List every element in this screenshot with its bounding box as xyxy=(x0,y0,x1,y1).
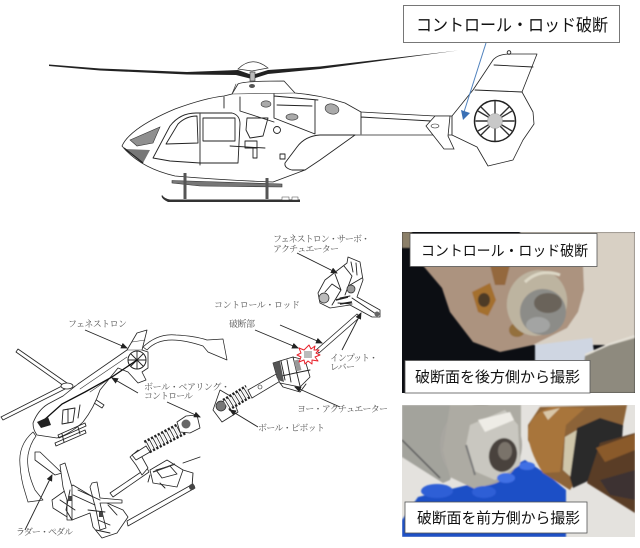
label: control rod fracture xyxy=(410,234,597,266)
main rotor xyxy=(49,50,458,88)
control linkage diagram xyxy=(1,234,388,538)
ball pivot, spring and shaft xyxy=(213,373,282,422)
label: photographed from rear: 破断面を後方側から撮影 xyxy=(415,368,580,386)
arrow: callout to tail xyxy=(461,43,486,120)
callout: control rod fracture xyxy=(404,6,620,42)
curved arrow to pedals xyxy=(20,432,43,502)
callout: control rod fracture: コントロール・ロッド破断 xyxy=(416,16,608,35)
landing skids xyxy=(162,173,300,202)
label: photographed from front: 破断面を前方側から撮影 xyxy=(417,509,580,527)
part labels: ヨー・アクチュエーター xyxy=(297,404,388,414)
small helicopter with control path xyxy=(1,330,148,446)
helicopter side view xyxy=(49,50,537,202)
part labels: インプット・ xyxy=(330,353,378,363)
part labels: ボール・ベアリング・ xyxy=(144,382,230,392)
curved arrow to detail xyxy=(143,335,227,360)
part labels: コントロール・ロッド xyxy=(214,300,300,310)
label: control rod fracture: コントロール・ロッド破断 xyxy=(421,243,588,260)
control rod xyxy=(316,314,360,353)
label: photographed from front xyxy=(405,502,587,533)
part labels: アクチュエーター xyxy=(273,244,339,254)
photo panel: fracture surface from rear xyxy=(402,232,635,393)
part labels: ラダー・ペダル xyxy=(16,527,73,537)
part labels: ボール・ピボット xyxy=(258,423,325,433)
fuselage xyxy=(122,51,537,182)
leader arrows xyxy=(25,253,361,530)
yaw actuator xyxy=(273,357,310,392)
label: photographed from rear xyxy=(405,360,590,393)
tail fan xyxy=(474,100,516,142)
part labels: 破断部 xyxy=(229,318,255,329)
part labels: フェネストロン xyxy=(68,319,127,329)
part labels xyxy=(16,234,388,537)
fenestron servo actuator xyxy=(318,257,380,317)
fracture point burst xyxy=(297,345,320,364)
photo panel: fracture surface from front xyxy=(402,404,635,537)
rudder pedal assembly xyxy=(35,415,200,538)
part labels: コントロール xyxy=(144,391,193,401)
part labels: フェネストロン・サーボ・ xyxy=(273,234,370,244)
part labels: レバー xyxy=(330,362,355,372)
